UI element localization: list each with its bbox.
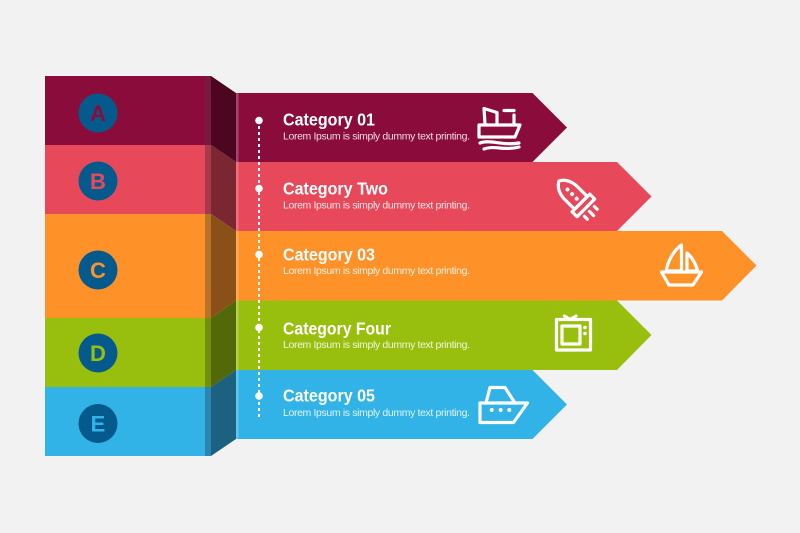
text: category two: Lorem Ipsum is simply dummy text printing. xyxy=(283,200,470,212)
icon: rocket xyxy=(550,172,602,224)
text: category 05: Category 05 xyxy=(283,386,375,406)
text: category 01 xyxy=(283,110,470,142)
text: category four: Lorem Ipsum is simply dummy text printing. xyxy=(283,339,470,351)
badge D xyxy=(78,334,118,372)
badge E: E xyxy=(91,412,105,436)
badge E xyxy=(78,404,118,443)
text: category four xyxy=(283,318,470,351)
arrow 1 xyxy=(236,93,567,162)
left block C xyxy=(45,214,236,318)
text: category 03: Category 03 xyxy=(283,244,375,264)
dotted timeline xyxy=(255,117,263,420)
left block B xyxy=(45,145,236,231)
arrow 5 xyxy=(236,370,567,439)
text: category 03: Lorem Ipsum is simply dummy text printing. xyxy=(283,265,470,277)
text: category two xyxy=(283,178,470,212)
left block A xyxy=(45,76,236,162)
text: category 05 xyxy=(283,386,470,419)
text: category four: Category Four xyxy=(283,318,391,338)
icon: television xyxy=(556,316,590,350)
arrow 4 xyxy=(236,300,652,370)
left block E xyxy=(45,370,236,456)
icon: cruise boat xyxy=(480,388,528,422)
text: category 01: Category 01 xyxy=(283,110,375,130)
badge B xyxy=(78,162,118,200)
text: category 05: Lorem Ipsum is simply dummy text printing. xyxy=(283,407,470,419)
text: category 03 xyxy=(283,244,470,277)
badge C xyxy=(78,250,118,290)
badge D: D xyxy=(90,341,106,366)
text: category two: Category Two xyxy=(283,178,388,198)
badge A xyxy=(78,94,118,132)
badge C: C xyxy=(90,258,106,283)
left block D xyxy=(45,300,236,387)
badge B: B xyxy=(90,169,106,194)
icon: junk ship xyxy=(479,108,520,149)
text: category 01: Lorem Ipsum is simply dummy text printing. xyxy=(283,130,470,142)
icon: sailboat xyxy=(662,245,702,285)
arrow 3 xyxy=(236,231,756,300)
badge A: A xyxy=(90,101,106,126)
arrow 2 xyxy=(236,162,652,231)
